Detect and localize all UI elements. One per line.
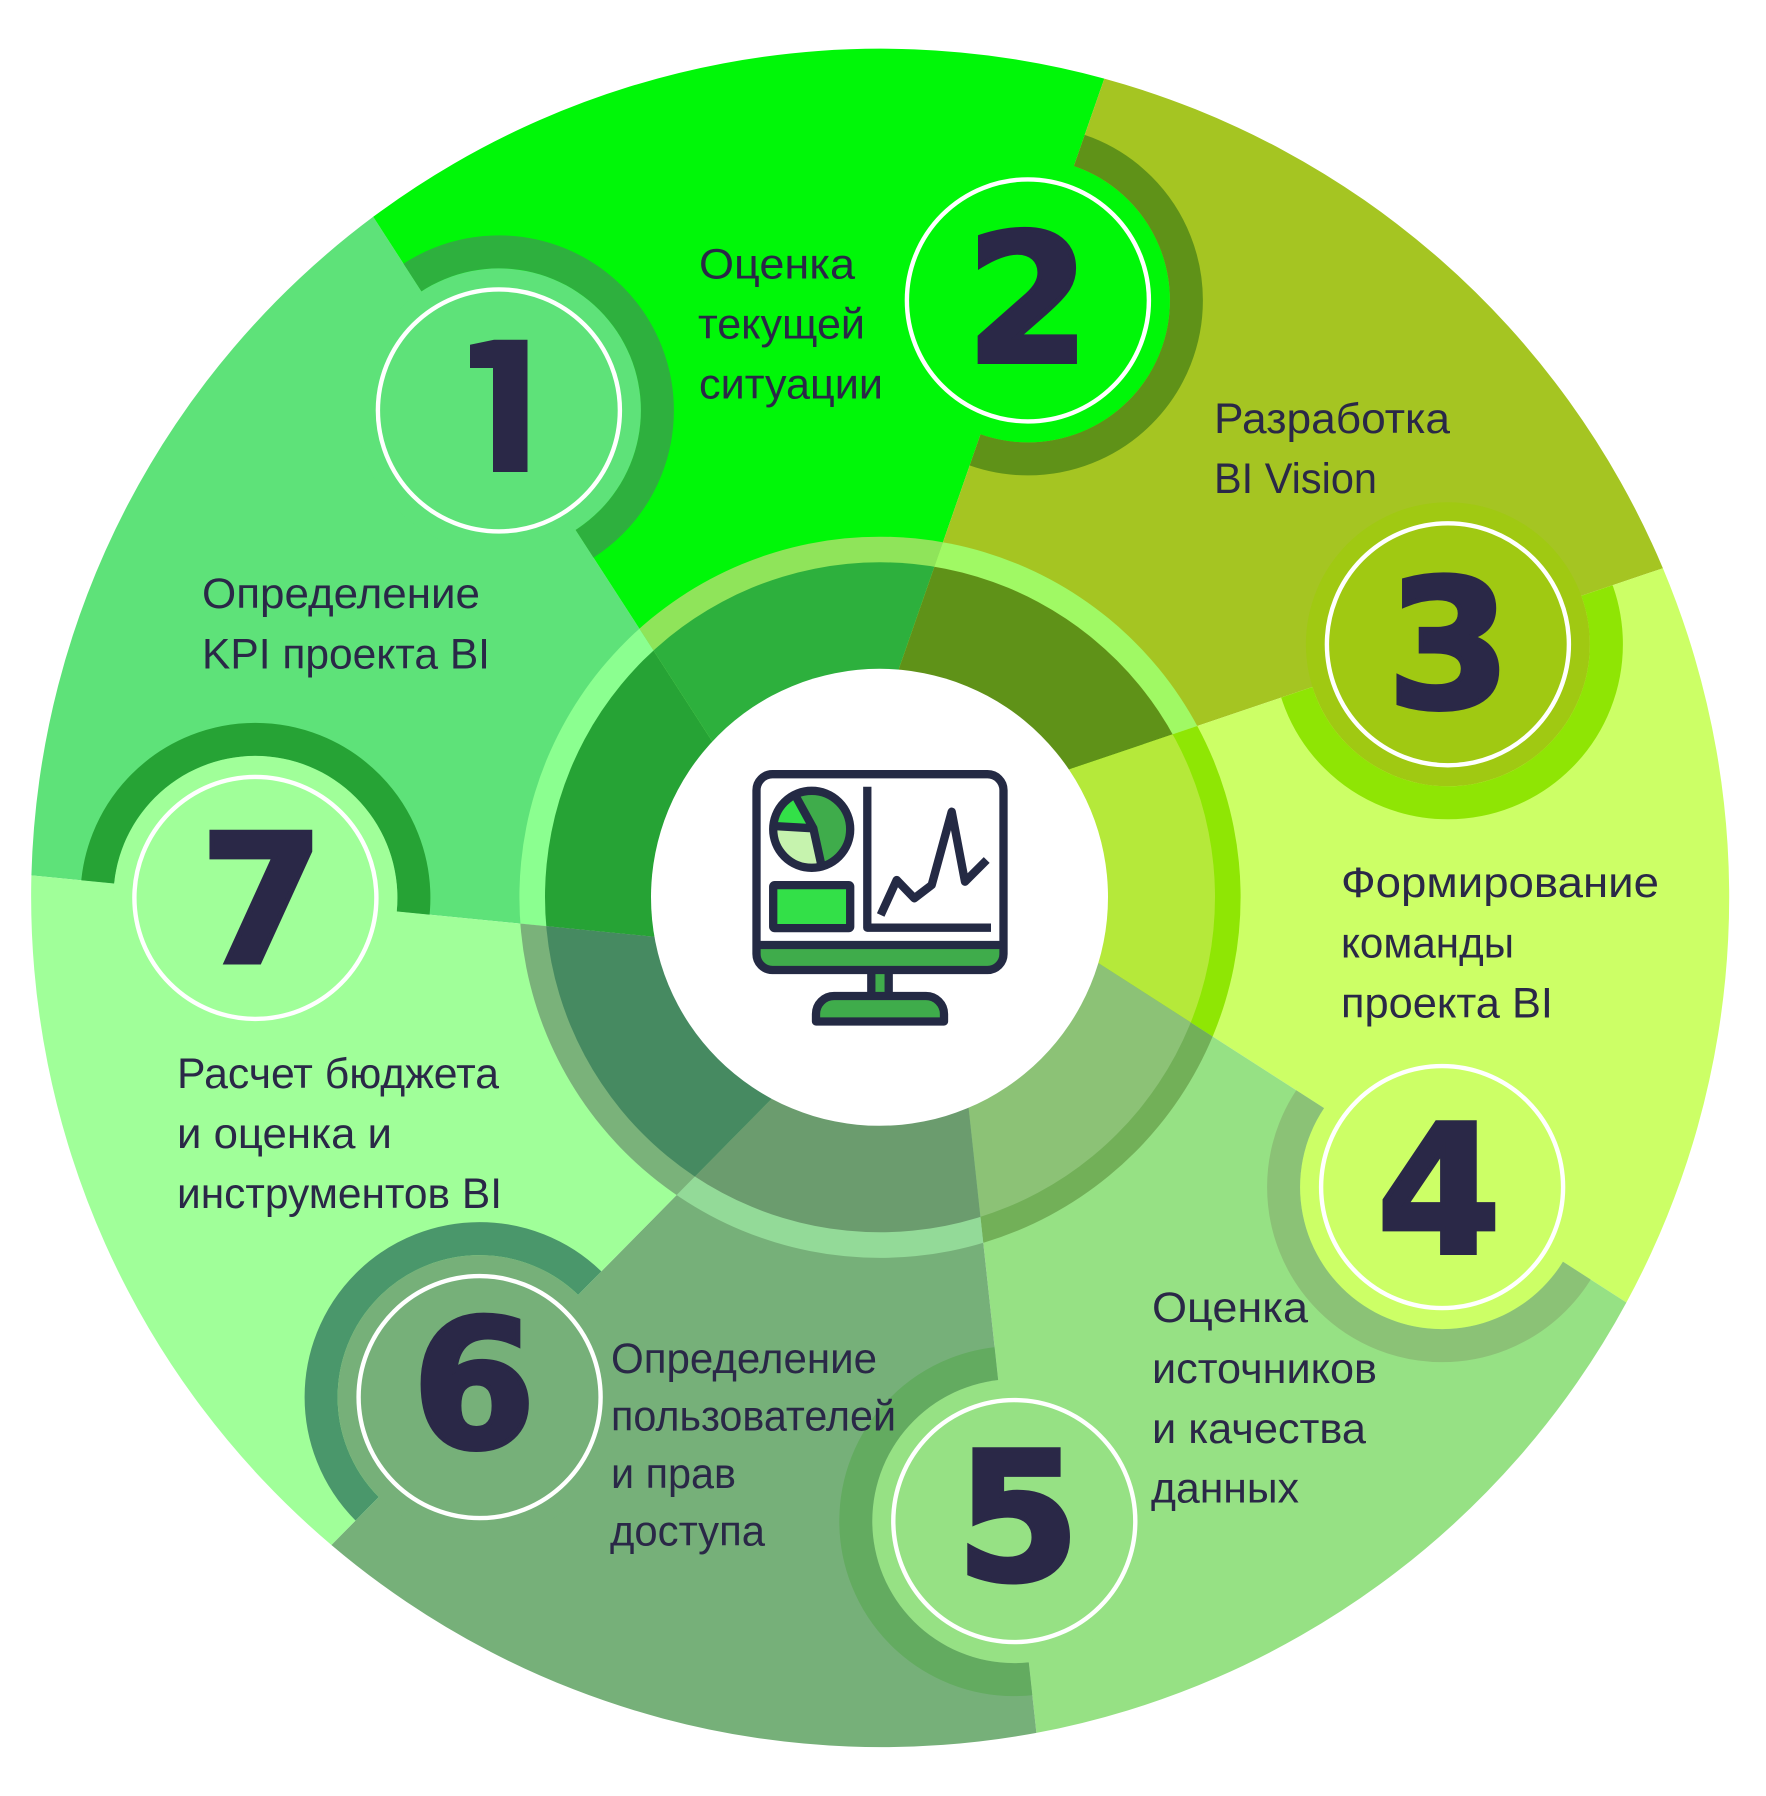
- step 5 badge: [856, 1363, 1173, 1680]
- step 6 badge: 6: [412, 1282, 536, 1489]
- step 2 badge: 2: [966, 196, 1090, 404]
- chart line: [881, 812, 987, 915]
- sector 3: [880, 79, 1663, 897]
- label: step 2 text: ситуации: [699, 361, 883, 409]
- green rectangle: [773, 885, 850, 928]
- label: step 2 text: текущей: [698, 301, 865, 349]
- label: step 6 text: Определение: [611, 1335, 877, 1383]
- sector 4: [880, 568, 1729, 1302]
- sector 2: [373, 49, 1104, 897]
- label: step 4 text: [1341, 859, 1659, 1028]
- label: step 1 text: [202, 570, 490, 678]
- label: step 1 text: KPI проекта BI: [202, 630, 490, 678]
- label: step 6 text: и прав: [611, 1450, 736, 1498]
- step 1 badge: [340, 252, 657, 569]
- label: step 7 text: и оценка и: [177, 1110, 392, 1158]
- label: step 5 text: данных: [1151, 1464, 1299, 1512]
- label: step 6 text: пользователей: [611, 1393, 896, 1441]
- center white circle: [651, 669, 1108, 1126]
- label: step 6 text: [610, 1335, 896, 1556]
- step 7 badge: [97, 739, 414, 1056]
- pie chart: [773, 791, 850, 868]
- label: step 6 text: доступа: [610, 1508, 765, 1556]
- panel: central ring: [519, 537, 1241, 1258]
- label: step 1 text: Определение: [202, 570, 480, 618]
- label: step 7 text: инструментов BI: [177, 1170, 502, 1218]
- step 3 badge: 3: [1387, 542, 1511, 749]
- label: step 4 text: проекта BI: [1341, 980, 1553, 1028]
- step 6 badge: [304, 1222, 603, 1520]
- label: step 3 text: [1214, 395, 1450, 503]
- label: step 5 text: [1151, 1284, 1377, 1512]
- step 1 badge: 1: [444, 307, 568, 514]
- label: step 2 text: Оценка: [699, 241, 855, 289]
- step 7 badge: 7: [200, 797, 324, 1004]
- label: step 4 text: команды: [1341, 920, 1514, 968]
- sector 6: [331, 897, 1036, 1747]
- label: step 5 text: источников: [1152, 1345, 1377, 1393]
- label: step 7 text: [177, 1050, 502, 1218]
- step 4 badge: [1284, 1029, 1601, 1346]
- label: step 4 text: Формирование: [1341, 859, 1659, 907]
- label: step 5 text: Оценка: [1152, 1284, 1308, 1332]
- step 3 badge: [1289, 486, 1606, 803]
- step 5 badge: 5: [956, 1414, 1080, 1622]
- label: step 3 text: Разработка: [1214, 395, 1450, 443]
- chart axes: [867, 787, 991, 928]
- sector 1: [31, 217, 880, 937]
- label: step 2 text: [698, 241, 883, 409]
- step 4 badge: 4: [1377, 1088, 1501, 1294]
- sector 5: [880, 897, 1626, 1733]
- label: step 5 text: и качества: [1152, 1405, 1366, 1453]
- label: step 7 text: Расчет бюджета: [177, 1050, 499, 1098]
- icon: monitor with charts: [756, 774, 1004, 1022]
- label: step 3 text: BI Vision: [1214, 455, 1377, 503]
- step 2 badge: [869, 142, 1186, 459]
- sector 7: [31, 875, 880, 1545]
